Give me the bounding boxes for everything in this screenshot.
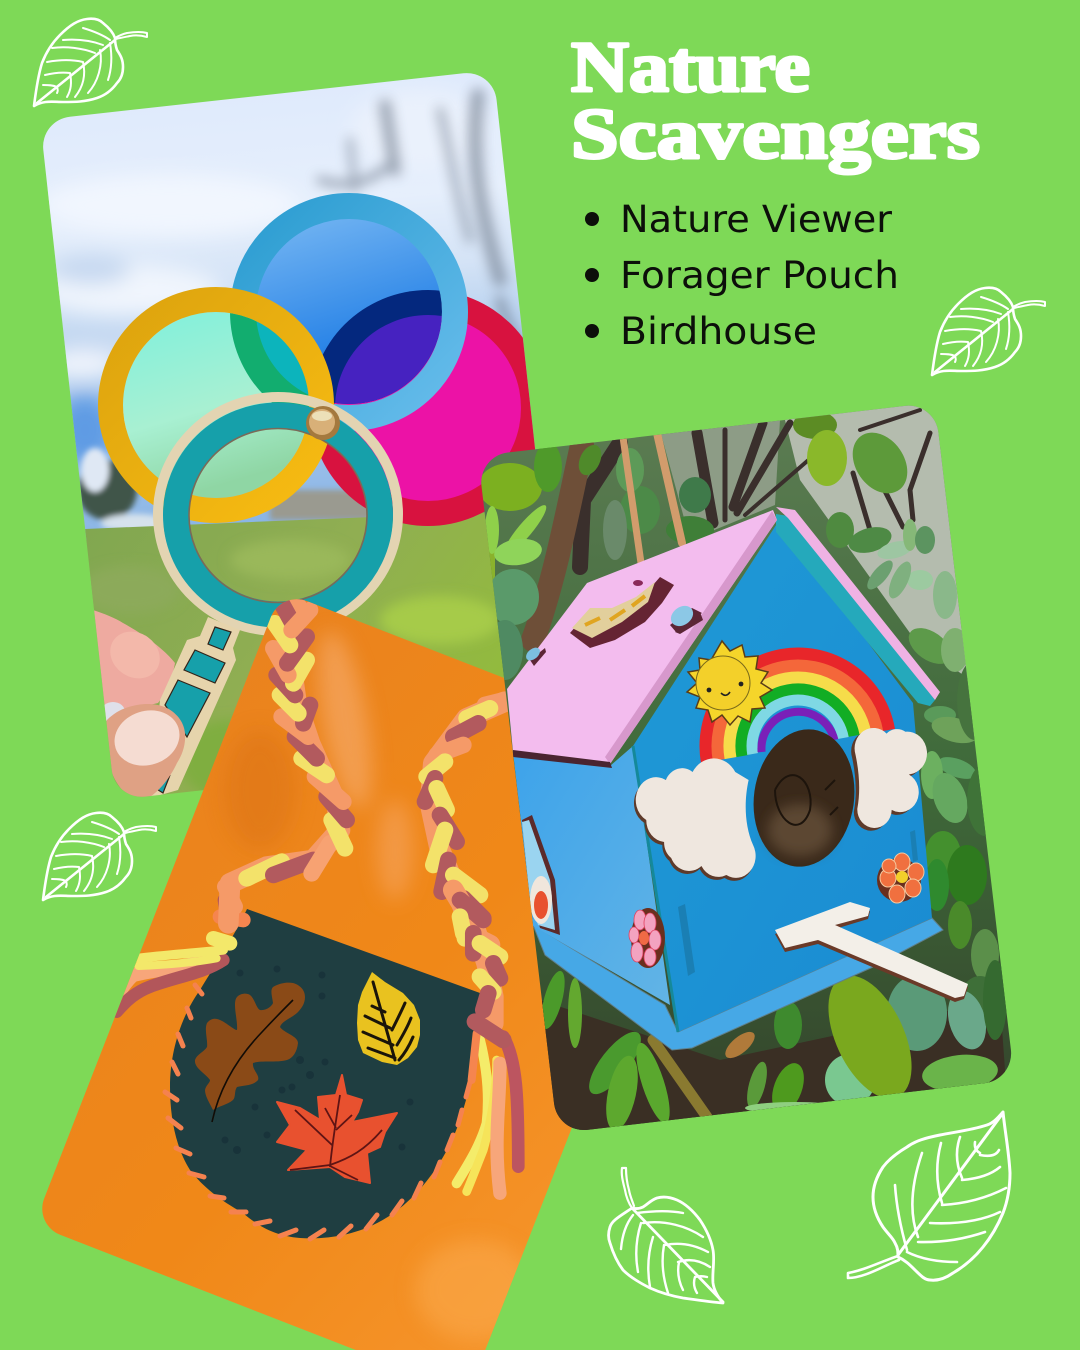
blue lens ring — [230, 193, 468, 431]
right cloud — [851, 728, 927, 831]
icon: leaf bottom middle — [608, 1168, 723, 1303]
photo: forager pouch — [42, 599, 572, 1350]
teal magnifier ring — [158, 397, 398, 631]
hand — [94, 610, 175, 722]
foliage upper — [478, 411, 969, 680]
entrance hole — [754, 729, 854, 867]
sky and field backdrop — [43, 73, 536, 797]
yellow lens ring — [98, 287, 334, 523]
branches — [580, 410, 930, 567]
orange backdrop — [42, 599, 572, 1350]
photo: birdhouse — [470, 390, 1030, 1150]
roof nest decoration — [570, 577, 674, 648]
thumb — [105, 702, 187, 799]
birdhouse body — [507, 507, 943, 1050]
foliage right — [921, 660, 1003, 1024]
dark felt pouch — [170, 909, 480, 1238]
wooden perch — [775, 902, 968, 1002]
title: Scavengers — [571, 94, 980, 174]
base plate — [533, 918, 943, 1050]
red and magenta lens — [321, 296, 536, 526]
yellow felt leaf — [357, 972, 420, 1065]
right strap lower section and tassel — [453, 890, 518, 1193]
right roof strip — [776, 514, 935, 706]
garden backdrop — [470, 390, 1030, 1150]
roof blue pegs — [524, 602, 703, 666]
title: Nature — [571, 27, 810, 107]
icon: large leaf bottom right — [848, 1112, 1010, 1280]
bullet list: Forager Pouch — [620, 253, 899, 297]
brown oak leaf — [195, 983, 305, 1122]
photo: nature viewer — [43, 73, 536, 797]
icon: leaf left middle — [43, 813, 156, 900]
red maple leaf — [277, 1075, 397, 1183]
gold rivet — [306, 406, 340, 440]
bullet list: Birdhouse — [620, 309, 817, 353]
icon: leaf right of list — [932, 288, 1045, 375]
left cloud — [634, 758, 756, 881]
orange flower — [877, 853, 924, 903]
roof panel — [507, 510, 777, 764]
left tassel and knot — [117, 887, 243, 1012]
right braided strap — [425, 700, 505, 950]
icon: leaf top left — [34, 19, 147, 106]
left braided strap — [228, 603, 347, 923]
pouch stitching — [165, 985, 470, 1239]
hanging rope — [623, 433, 682, 577]
bullet list: Nature Viewer — [620, 197, 893, 241]
front wall — [633, 522, 932, 1032]
pink flower — [629, 908, 665, 968]
magnifier handle — [150, 617, 240, 798]
foliage lower — [537, 960, 1007, 1133]
rainbow — [706, 654, 889, 762]
title — [571, 27, 980, 174]
side wall — [513, 746, 670, 1005]
sun — [687, 641, 772, 725]
slots in the wall — [678, 830, 918, 976]
side wall decal — [522, 815, 560, 935]
bullet list — [585, 197, 899, 353]
